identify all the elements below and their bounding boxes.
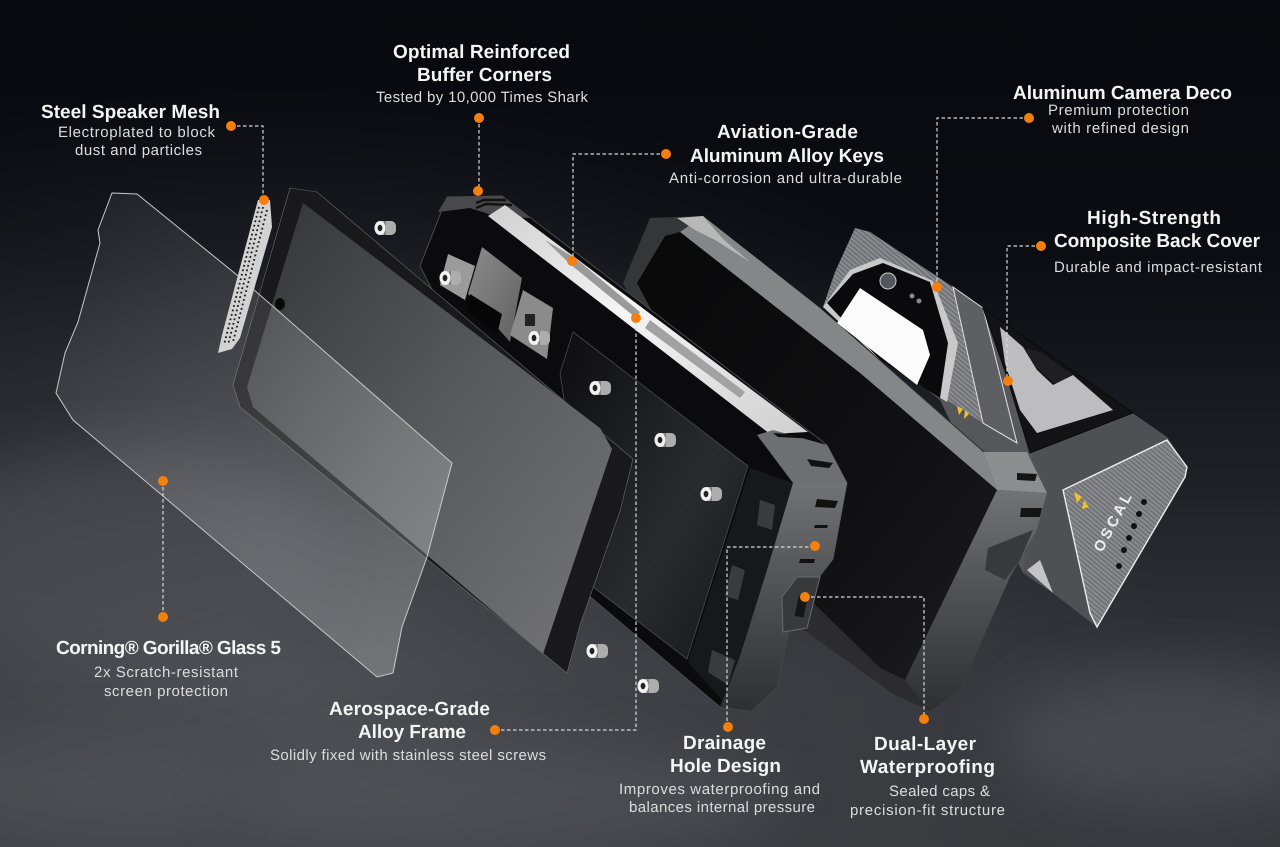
callout: camera deco: Aluminum Camera Deco <box>1013 83 1232 104</box>
callout: dual-layer waterproofing: Waterproofing <box>860 757 995 778</box>
callout: drainage hole <box>619 541 820 816</box>
side wall <box>720 483 847 711</box>
center light panel <box>1000 327 1113 433</box>
yellow chevrons <box>957 406 1089 509</box>
callout: gorilla glass: screen protection <box>104 683 228 700</box>
rear frame outer shell <box>623 216 1047 711</box>
callout: gorilla glass: Corning® Gorilla® Glass 5 <box>56 638 281 659</box>
lower carbon panel <box>1063 440 1187 627</box>
display screen <box>247 203 612 654</box>
callout: camera deco: with refined design <box>1051 120 1189 137</box>
battery plate <box>560 332 748 659</box>
callout: dual-layer waterproofing <box>800 592 1005 819</box>
callout: buffer corners: Tested by 10,000 Times Shark <box>376 89 588 106</box>
top corner grip <box>438 196 530 218</box>
callout: composite back cover <box>1003 208 1263 386</box>
callout: steel speaker mesh: Electroplated to block <box>58 124 216 141</box>
callout: buffer corners: Buffer Corners <box>417 65 552 86</box>
back cover body <box>823 228 1187 627</box>
rear frame right side <box>905 490 1047 711</box>
middle alloy frame <box>420 196 847 711</box>
rear port slots <box>1017 473 1042 517</box>
callout: alloy frame: Aerospace-Grade <box>329 699 490 720</box>
rear side recess <box>985 530 1033 580</box>
callout: buffer corners: Optimal Reinforced <box>393 42 570 63</box>
waterproof cap <box>782 577 820 632</box>
rear frame top edge <box>680 216 997 490</box>
callout: buffer corners <box>376 42 588 196</box>
callout: dual-layer waterproofing: Sealed caps & <box>889 783 990 800</box>
camera island <box>823 258 958 402</box>
callout: gorilla glass: 2x Scratch-resistant <box>94 664 239 681</box>
callout: aluminum alloy keys <box>567 122 902 266</box>
callout: alloy frame: Alloy Frame <box>358 722 466 743</box>
callout: drainage hole: Drainage <box>683 733 766 754</box>
rear frame right corner <box>983 452 1047 493</box>
callout: camera deco: Premium protection <box>1048 102 1189 119</box>
rear frame <box>623 216 1047 711</box>
callout: composite back cover: Durable and impact-resistant <box>1054 259 1263 276</box>
callout: aluminum alloy keys: Aviation-Grade <box>717 122 858 143</box>
callout: gorilla glass <box>56 476 281 700</box>
brand mark: OSCAL <box>1091 490 1136 555</box>
upper gray panel <box>953 287 1017 443</box>
callout: aluminum alloy keys: Anti-corrosion and ultra-durable <box>669 170 902 187</box>
punch-hole camera <box>275 298 285 310</box>
callout: steel speaker mesh: dust and particles <box>75 142 202 159</box>
connector board <box>688 468 793 700</box>
lower corner grip <box>757 430 847 483</box>
callout: steel speaker mesh <box>41 102 269 205</box>
callout: dual-layer waterproofing: precision-fit structure <box>850 802 1005 819</box>
callout: steel speaker mesh: Steel Speaker Mesh <box>41 102 220 123</box>
callout: aluminum alloy keys: Aluminum Alloy Keys <box>690 146 884 167</box>
vent dots <box>1116 499 1147 569</box>
side slots <box>799 459 838 563</box>
phone display <box>233 188 633 673</box>
callout: alloy frame <box>270 313 641 764</box>
screws <box>374 221 722 693</box>
callout: dual-layer waterproofing: Dual-Layer <box>874 734 977 755</box>
rear frame interior <box>637 232 997 680</box>
callout: composite back cover: Composite Back Cover <box>1054 231 1261 252</box>
middle frame body <box>420 196 847 711</box>
metal shields <box>468 247 522 342</box>
speaker mesh <box>218 200 272 353</box>
callout: alloy frame: Solidly fixed with stainless steel screws <box>270 747 546 764</box>
display bezel <box>233 188 633 673</box>
rear frame lower band <box>790 590 930 711</box>
back cover <box>823 228 1187 627</box>
callout: drainage hole: Hole Design <box>670 756 781 777</box>
callout: camera deco <box>932 83 1232 292</box>
callout: composite back cover: High-Strength <box>1087 208 1221 229</box>
silver key rail <box>488 205 808 434</box>
center black window <box>983 308 1133 453</box>
lower dark panel <box>1023 415 1187 627</box>
callout: drainage hole: Improves waterproofing and <box>619 781 820 798</box>
callout: drainage hole: balances internal pressure <box>629 799 815 816</box>
upper carbon section <box>823 228 983 423</box>
tempered glass <box>56 193 452 677</box>
